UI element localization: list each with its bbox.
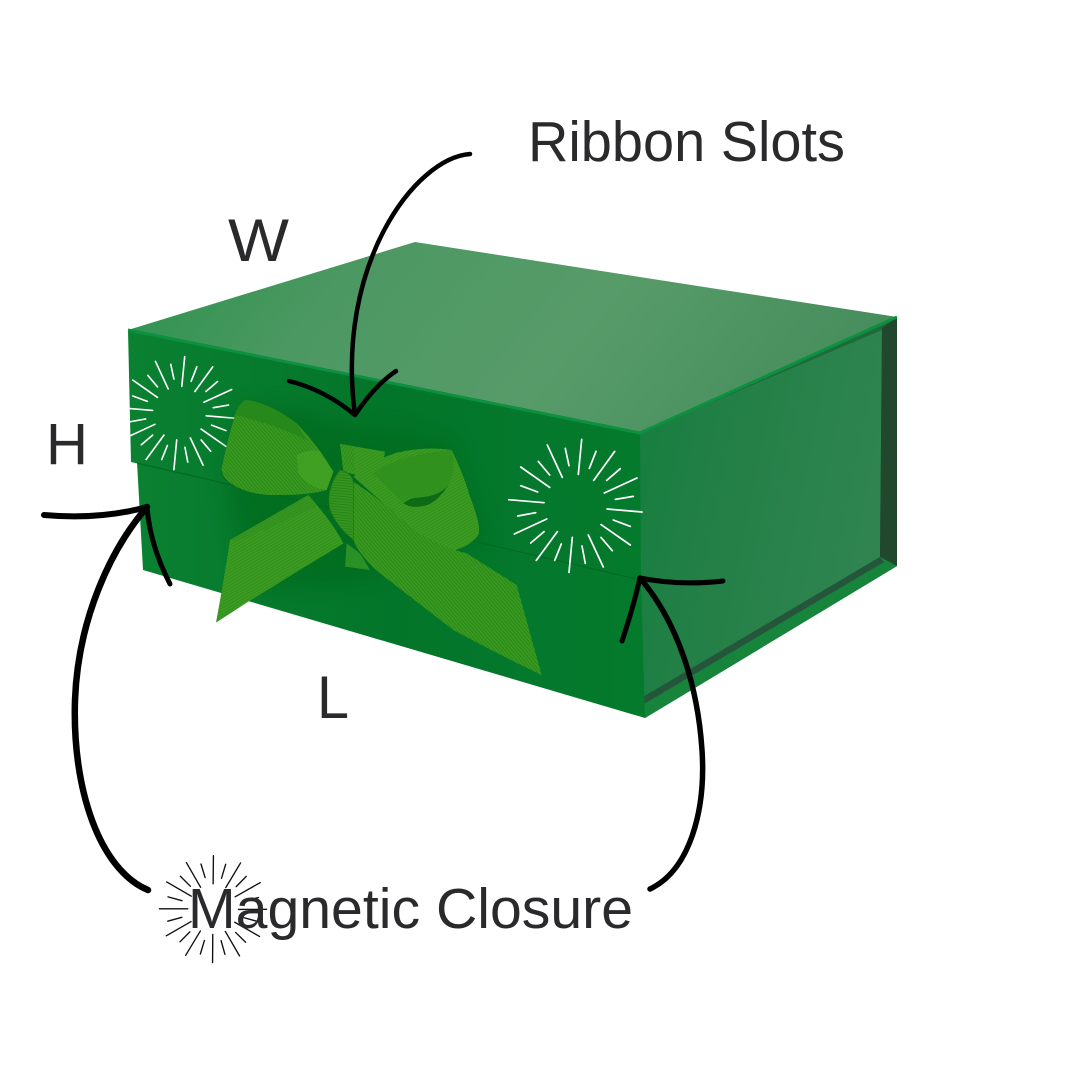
box lid front: [128, 330, 641, 580]
infographic canvas: [41, 120, 898, 964]
bow knot: [329, 470, 353, 540]
arrow: ribbon slots: [289, 154, 470, 415]
label: magnetic closure: Magnetic Closure: [188, 877, 633, 941]
right loop hole: [403, 485, 448, 507]
box top face: [128, 242, 897, 434]
left tail shade: [230, 495, 317, 542]
arrow: magnetic closure right: [622, 578, 723, 889]
bow shadow: [225, 405, 485, 590]
gift box: [128, 242, 897, 718]
label: ribbon slots: Ribbon Slots: [528, 110, 845, 174]
left loop: [222, 400, 333, 495]
left loop pleat: [297, 451, 333, 490]
starburst: magnetic closure label: [155, 851, 271, 967]
box side panel: [636, 317, 897, 718]
lid bottom shadow line: [137, 463, 641, 580]
starburst: box front left: [123, 357, 236, 470]
top strap: [340, 444, 385, 475]
right loop: [353, 448, 479, 552]
label: height: H: [46, 412, 88, 477]
left tail: [216, 495, 343, 623]
right loop shaded upper: [373, 450, 454, 503]
left loop inner fold: [235, 400, 307, 440]
ribbon slot strap bottom: [345, 543, 370, 570]
vertical strap: [341, 444, 355, 472]
label: length: L: [317, 664, 349, 731]
lid edge highlight: [128, 317, 897, 433]
label: width: W: [228, 207, 289, 274]
starburst: box front right: [509, 439, 642, 572]
ribbon bow: [216, 400, 542, 675]
box base front: [137, 462, 645, 718]
right tail band: [353, 482, 542, 675]
arrow: magnetic closure left: [44, 507, 170, 890]
